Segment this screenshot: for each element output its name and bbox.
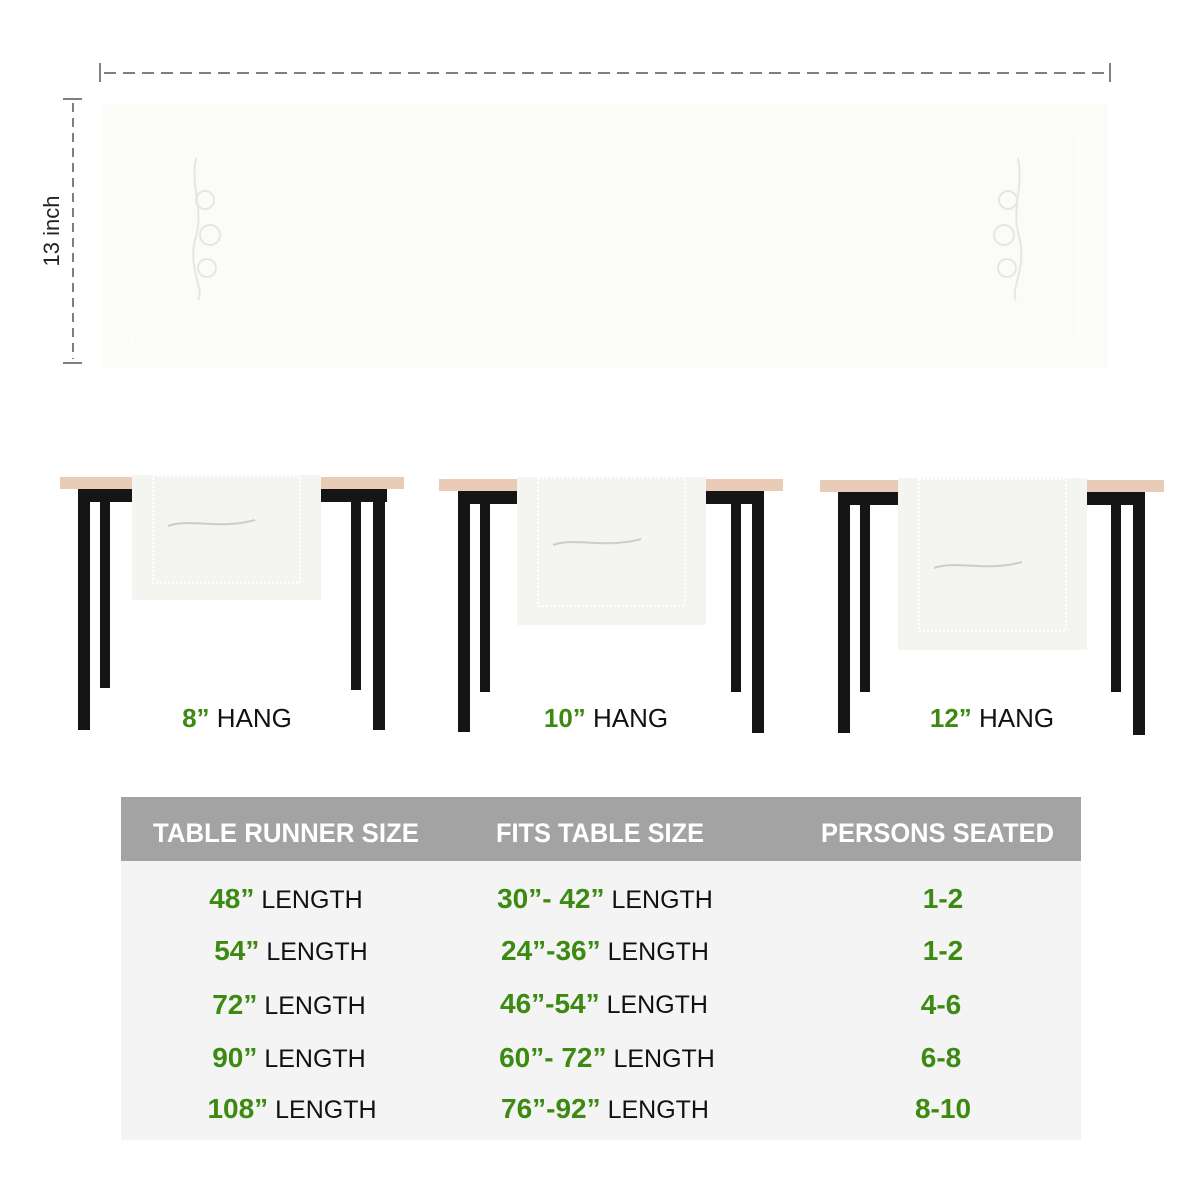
table header: FITS TABLE SIZE xyxy=(496,818,704,848)
table rows: 108” LENGTH xyxy=(207,1093,377,1124)
table header: PERSONS SEATED xyxy=(821,818,1054,848)
width dimension line xyxy=(100,63,1110,82)
size table xyxy=(121,797,1081,1140)
table 1: 8" hang xyxy=(60,475,404,733)
table rows: 54” LENGTH xyxy=(214,935,368,966)
embroidery right xyxy=(994,158,1021,300)
table rows: 90” LENGTH xyxy=(212,1042,366,1073)
embroidery left xyxy=(193,158,220,300)
table rows xyxy=(207,883,715,1124)
table header: TABLE RUNNER SIZE xyxy=(153,818,419,848)
size table: 1-2 xyxy=(923,935,963,966)
table rows: 76”-92” LENGTH xyxy=(501,1093,709,1124)
table header xyxy=(121,797,1081,861)
table 2: 10" hang xyxy=(439,477,783,733)
table 1: 8" hang: 8” HANG xyxy=(182,703,292,733)
table rows: 30”- 42” LENGTH xyxy=(497,883,713,914)
height dimension line xyxy=(63,99,82,363)
size table: 6-8 xyxy=(921,1042,961,1073)
table rows: 60”- 72” LENGTH xyxy=(499,1042,715,1073)
table rows: 24”-36” LENGTH xyxy=(501,935,709,966)
size table: 1-2 xyxy=(923,883,963,914)
table rows: 72” LENGTH xyxy=(212,989,366,1020)
table 3: 12" hang xyxy=(820,478,1164,735)
label: 13 inch: 13 inch xyxy=(39,196,64,266)
table 2: 10" hang: 10” HANG xyxy=(544,703,668,733)
table 3: 12" hang: 12” HANG xyxy=(930,703,1054,733)
size table: 8-10 xyxy=(915,1093,971,1124)
table runner top view xyxy=(102,104,1108,368)
table rows: 46”-54” LENGTH xyxy=(500,988,708,1019)
size table: 4-6 xyxy=(921,989,961,1020)
table rows: 48” LENGTH xyxy=(209,883,363,914)
